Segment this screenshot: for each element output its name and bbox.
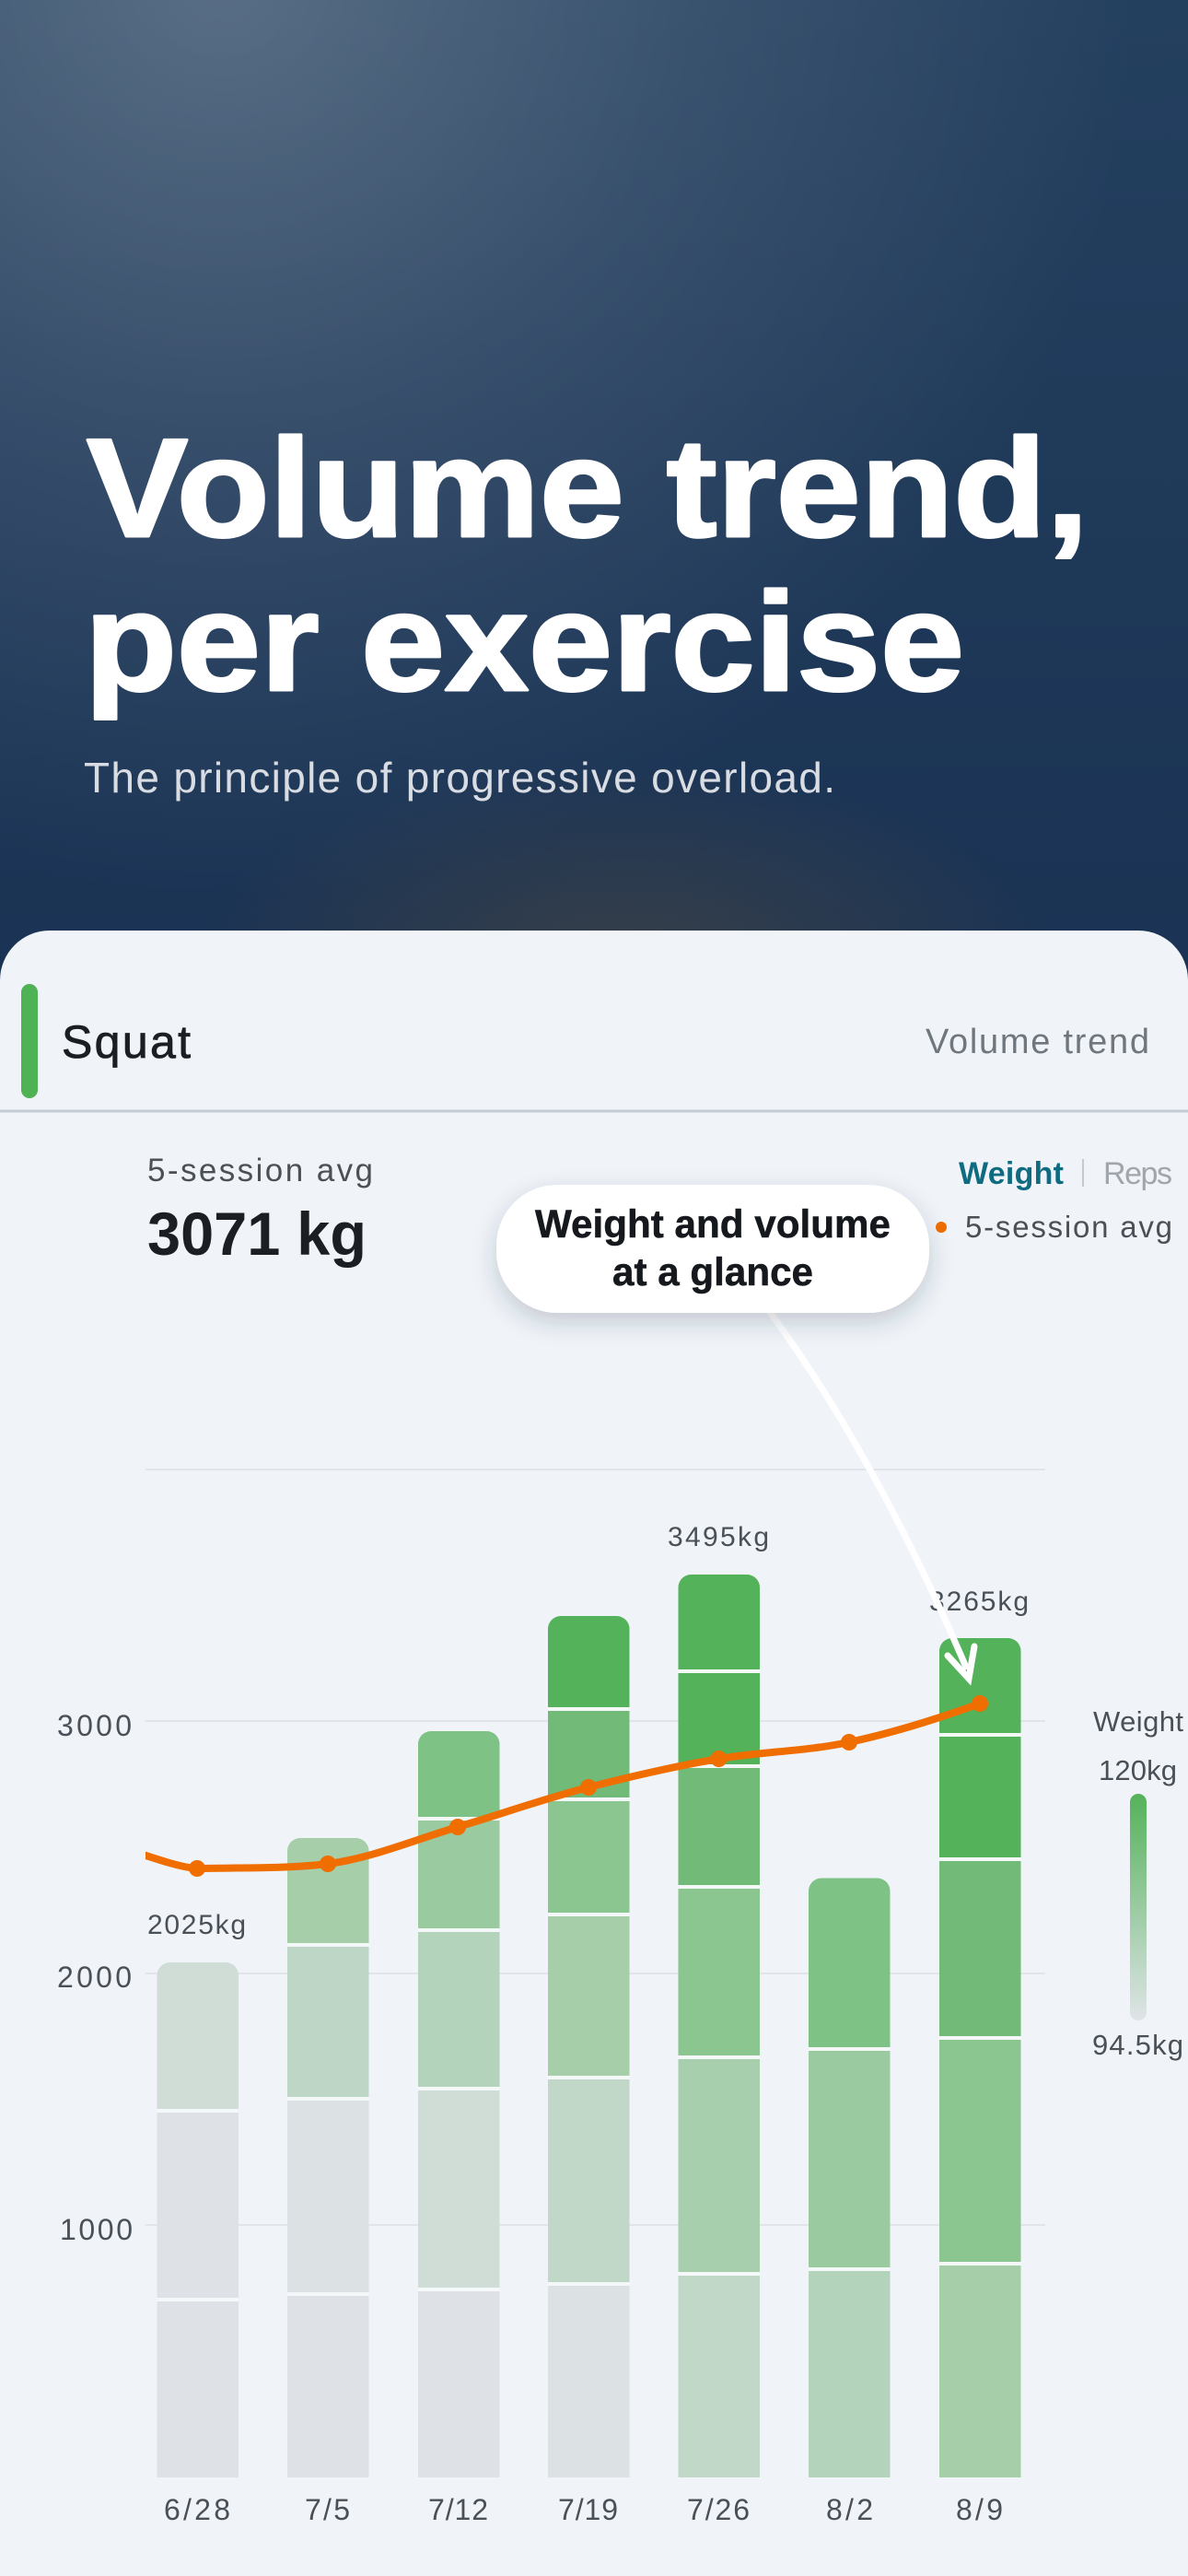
bar: 7/26: [678, 1575, 760, 2477]
card header: exercise name: Squat: [62, 1016, 191, 1068]
toggle: weight and reps: Reps: [1103, 1156, 1172, 1191]
legend: weight gradient: [1092, 1705, 1183, 2061]
legend: weight gradient: 94.5kg: [1092, 2029, 1183, 2061]
callout: at a glance: [612, 1250, 813, 1294]
subtitle: The principle of progressive overload.: [84, 754, 835, 802]
legend: 5-session avg line: 5-session avg: [965, 1210, 1172, 1244]
x axis labels: 8/2: [826, 2493, 873, 2526]
card header: chart type: Volume trend: [926, 1023, 1149, 1061]
trend line: 5-session average: [129, 1695, 988, 1877]
value labels: 2025kg: [147, 1910, 246, 1940]
arrow: callout to latest point: [767, 1308, 974, 1679]
stat: 5-session average: 3071 kg: [147, 1200, 367, 1268]
title: [85, 410, 1089, 720]
stat: 5-session average: [147, 1153, 373, 1268]
x axis labels: 6/28: [164, 2493, 230, 2526]
callout: Weight and volume: [535, 1202, 891, 1247]
bar: 7/12: [418, 1731, 499, 2477]
bar: 6/28: [157, 1962, 239, 2477]
panel: squat volume card: [0, 931, 1188, 2576]
chart: volume bars with trend line: [57, 1469, 1045, 2526]
x axis labels: [164, 2493, 1003, 2526]
value labels: 3265kg: [929, 1587, 1029, 1617]
x axis labels: 7/5: [305, 2493, 350, 2526]
bar: 8/2: [809, 1878, 891, 2477]
toggle: weight and reps: [959, 1156, 1172, 1191]
x axis labels: 7/26: [687, 2493, 750, 2526]
stat: 5-session average: 5-session avg: [147, 1153, 373, 1188]
bar: 7/5: [287, 1838, 368, 2477]
hero background: [0, 0, 1188, 1013]
value labels: 3495kg: [668, 1522, 769, 1552]
x axis labels: 7/12: [428, 2493, 488, 2526]
y axis labels: 1000: [60, 2213, 133, 2246]
value labels: [147, 1522, 1029, 1940]
bar: 7/19: [548, 1616, 630, 2477]
callout: [496, 1185, 929, 1313]
title: per exercise: [85, 564, 964, 720]
card header: exercise marker: [21, 984, 38, 1098]
y axis labels: [57, 1709, 133, 2246]
y axis labels: 2000: [57, 1961, 132, 1994]
bar: 8/9: [939, 1638, 1020, 2477]
title: Volume trend,: [87, 410, 1089, 567]
legend: weight gradient: Weight: [1093, 1705, 1183, 1738]
legend: weight gradient: 120kg: [1099, 1754, 1177, 1786]
y axis labels: 3000: [57, 1709, 132, 1742]
toggle: weight and reps: Weight: [959, 1156, 1064, 1191]
x axis labels: 7/19: [558, 2493, 618, 2526]
header divider: [0, 1109, 1188, 1113]
x axis labels: 8/9: [956, 2493, 1003, 2526]
